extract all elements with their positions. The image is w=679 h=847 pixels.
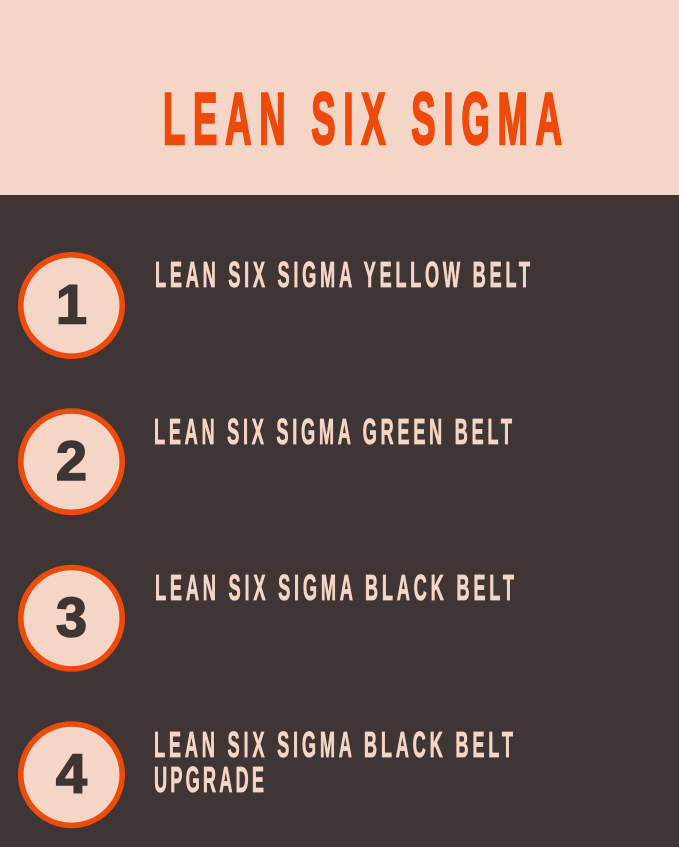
icon: number 4 badge: 4 bbox=[56, 742, 87, 805]
icon: number 2 badge: 2 bbox=[56, 429, 87, 492]
label: green belt: LEAN SIX SIGMA GREEN BELT bbox=[154, 412, 512, 453]
label: black belt upgrade: UPGRADE bbox=[154, 760, 264, 801]
title: LEAN SIX SIGMA bbox=[163, 79, 562, 160]
icon: number 1 badge: 1 bbox=[56, 272, 87, 336]
item 4 bbox=[21, 724, 513, 825]
item 2 bbox=[21, 411, 512, 512]
header band bbox=[0, 0, 679, 195]
icon: number 3 badge bbox=[21, 568, 122, 669]
label: yellow belt: LEAN SIX SIGMA YELLOW BELT bbox=[155, 255, 530, 296]
icon: number 2 badge bbox=[21, 411, 122, 512]
item 1 bbox=[21, 255, 530, 356]
icon: number 3 badge: 3 bbox=[56, 586, 87, 648]
label: black belt: LEAN SIX SIGMA BLACK BELT bbox=[155, 568, 514, 609]
label: black belt upgrade bbox=[154, 725, 513, 801]
icon: number 1 badge bbox=[21, 255, 122, 356]
label: black belt upgrade: LEAN SIX SIGMA BLACK BELT bbox=[154, 725, 513, 766]
item 3 bbox=[21, 568, 514, 669]
icon: number 4 badge bbox=[21, 724, 122, 825]
